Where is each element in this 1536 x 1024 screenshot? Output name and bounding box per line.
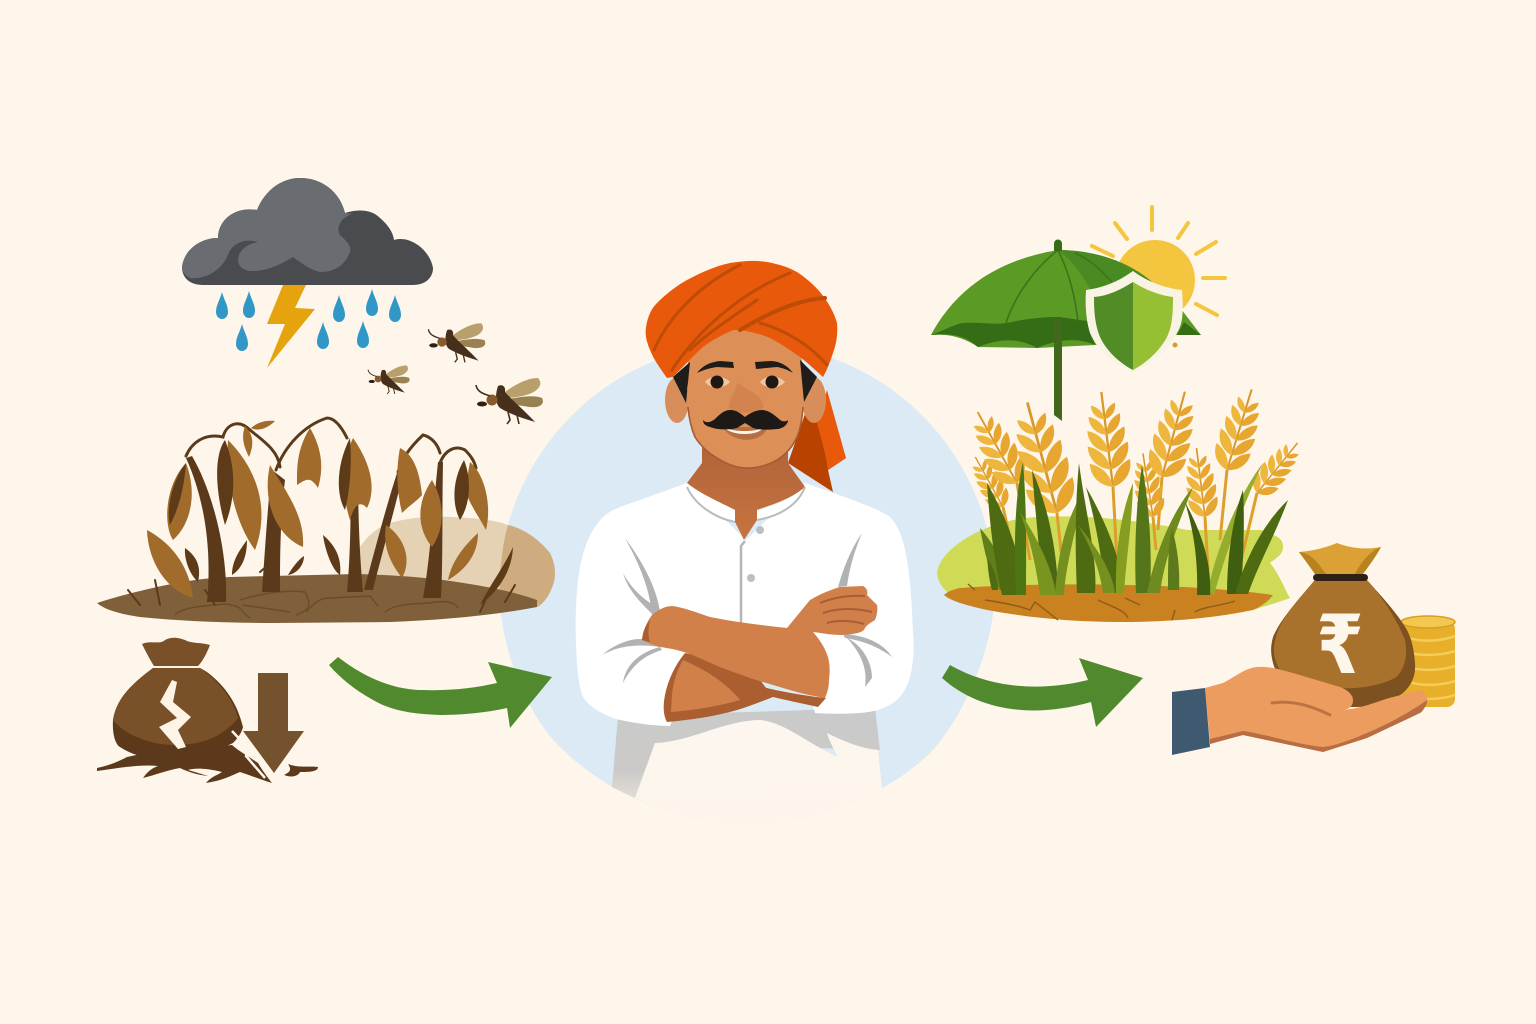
shirt bbox=[576, 483, 914, 726]
dark forearm edge bbox=[687, 653, 826, 707]
farmer figure bbox=[576, 261, 914, 825]
panel: risks bbox=[97, 178, 555, 783]
wheat stems bbox=[1003, 470, 1257, 580]
arrow: left to centre bbox=[329, 657, 552, 728]
turban bbox=[646, 261, 837, 378]
neck bbox=[687, 440, 805, 540]
icon: sun bbox=[1092, 207, 1225, 320]
roots under the bag bbox=[97, 745, 272, 783]
fertile ground bbox=[944, 584, 1273, 622]
coin stack bbox=[1401, 616, 1455, 707]
collar bbox=[687, 483, 805, 522]
down arrow bbox=[243, 673, 304, 773]
hair bbox=[673, 360, 817, 403]
placket bbox=[741, 541, 745, 624]
face bbox=[688, 319, 804, 468]
crossed arms bbox=[642, 586, 877, 722]
elbow shade bbox=[642, 620, 650, 642]
cracked ground bbox=[97, 574, 537, 623]
shirt fold details bbox=[602, 533, 892, 687]
icon: rain drops bbox=[216, 289, 401, 351]
icon: green umbrella bbox=[931, 240, 1201, 421]
icon: locust top bbox=[428, 323, 485, 362]
icon: cracked money bag with down arrow bbox=[97, 638, 318, 783]
turban tail bbox=[788, 385, 846, 492]
moustache bbox=[703, 410, 788, 430]
shirt buttons bbox=[747, 526, 764, 582]
eyebrows bbox=[697, 361, 793, 373]
lower garment shadow bbox=[612, 708, 880, 798]
icon: locust middle bbox=[368, 365, 410, 394]
lower forearm bbox=[664, 653, 773, 722]
small droplet under shield bbox=[1172, 342, 1178, 348]
dry mound bbox=[360, 517, 555, 608]
icon: lightning bolt bbox=[267, 285, 315, 368]
bag top bbox=[142, 638, 210, 666]
rupee symbol: ₹ bbox=[1316, 597, 1364, 693]
icon: locust right bbox=[476, 378, 543, 424]
icon: shield bbox=[1086, 271, 1183, 372]
lower garment bbox=[635, 720, 882, 825]
light green mound bbox=[937, 516, 1290, 610]
jaw line bbox=[688, 407, 803, 468]
crack symbol bbox=[159, 680, 191, 749]
bag body bbox=[113, 668, 243, 758]
eyes bbox=[705, 376, 785, 388]
panel: protection bbox=[931, 207, 1455, 755]
arrow: centre to right bbox=[942, 658, 1143, 727]
nose shadow bbox=[729, 383, 763, 413]
hand bbox=[1172, 667, 1427, 755]
icon: storm cloud bbox=[182, 178, 433, 285]
upper forearm and hand bbox=[642, 586, 877, 698]
bag bbox=[1271, 543, 1415, 707]
green grass blades bbox=[980, 462, 1288, 595]
finger lines bbox=[820, 596, 872, 624]
wilted crops bbox=[128, 418, 515, 612]
wheat ears bbox=[963, 384, 1308, 519]
smile bbox=[723, 427, 768, 440]
ears bbox=[665, 377, 826, 423]
icon: money bag on hand bbox=[1172, 543, 1455, 755]
blue circle behind farmer bbox=[499, 343, 995, 825]
